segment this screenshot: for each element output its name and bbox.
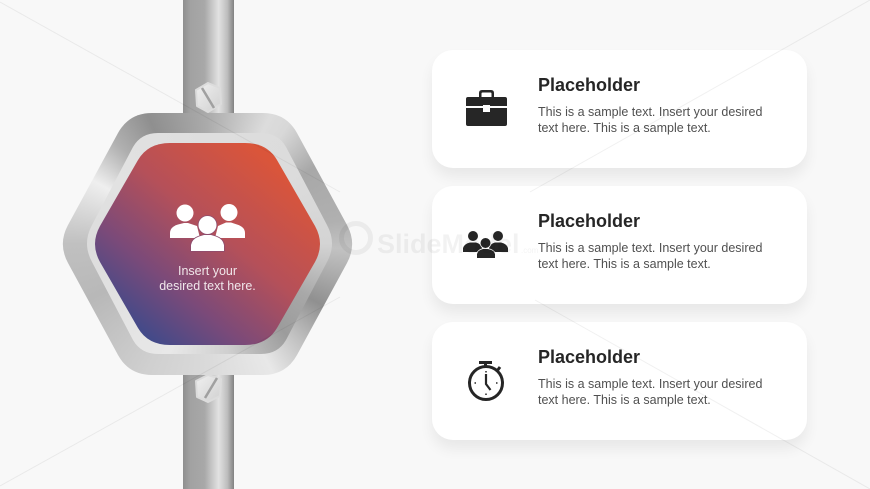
body text	[538, 241, 762, 270]
bottom bolt	[196, 375, 221, 402]
body text: text here. This is a sample text.	[538, 256, 711, 270]
heading: Placeholder	[538, 211, 640, 231]
card 1	[432, 50, 807, 168]
body text: This is a sample text. Insert your desired	[538, 377, 762, 391]
body text	[538, 105, 762, 134]
watermark overlay with diagonal lines: SlideModel	[377, 229, 520, 259]
icon: people white	[170, 204, 245, 251]
body text: text here. This is a sample text.	[538, 392, 711, 406]
outer metal hexagon	[57, 113, 358, 375]
badge text: desired text here.	[159, 279, 256, 293]
inner light ring	[82, 133, 337, 354]
top bolt	[196, 83, 221, 112]
pole	[183, 0, 234, 489]
heading: Placeholder	[538, 347, 640, 367]
body text: text here. This is a sample text.	[538, 120, 711, 134]
icon: stopwatch	[468, 361, 504, 401]
heading: Placeholder	[538, 75, 640, 95]
card 2	[432, 186, 807, 304]
body text: This is a sample text. Insert your desired	[538, 241, 762, 255]
icon: briefcase	[466, 90, 507, 126]
body text: This is a sample text. Insert your desired	[538, 105, 762, 119]
icon: people	[463, 231, 508, 258]
badge text: Insert your	[178, 264, 237, 278]
body text	[538, 377, 762, 406]
card 3	[432, 322, 807, 440]
gradient hexagon	[95, 143, 320, 345]
watermark overlay with diagonal lines: .com	[521, 246, 539, 255]
